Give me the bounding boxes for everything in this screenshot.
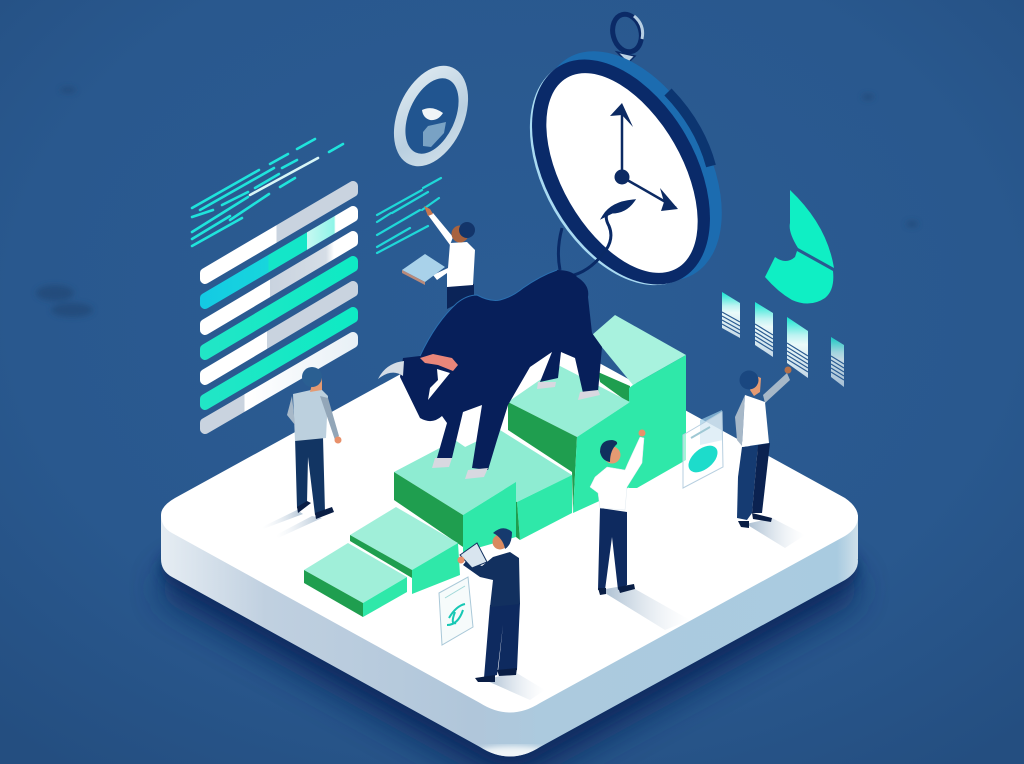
bull back highlight xyxy=(420,270,557,356)
clock hands xyxy=(610,103,678,211)
gap between head and neck xyxy=(428,369,450,400)
step F xyxy=(592,315,686,488)
person left xyxy=(287,367,342,519)
bull body xyxy=(400,270,602,470)
right card xyxy=(683,410,723,488)
bull hooves xyxy=(432,382,600,479)
bull xyxy=(378,270,602,479)
background smudges xyxy=(36,87,918,317)
small ring icon xyxy=(379,54,483,178)
clock loop xyxy=(609,11,645,63)
platform side xyxy=(161,358,858,756)
text lines left xyxy=(192,139,343,246)
bull tail xyxy=(558,201,633,276)
step B xyxy=(350,507,460,594)
clock face xyxy=(515,48,729,298)
bull ear xyxy=(420,354,458,371)
clock xyxy=(493,11,759,316)
clock rim xyxy=(503,20,759,312)
mini bar panels xyxy=(722,292,844,387)
platform corner highlight xyxy=(480,744,543,756)
person with book xyxy=(402,206,475,309)
green stairs xyxy=(304,315,686,617)
platform top xyxy=(161,314,858,712)
bull horn xyxy=(378,361,404,379)
platform shadow xyxy=(161,366,858,764)
step E xyxy=(508,366,630,513)
text lines center xyxy=(377,178,441,253)
step A xyxy=(304,543,407,617)
progress bars panel xyxy=(205,186,353,429)
bottom card xyxy=(439,577,473,645)
step D xyxy=(463,430,572,540)
person bottom with tablet xyxy=(458,528,520,682)
step C xyxy=(394,440,516,552)
platform xyxy=(161,352,858,756)
pie chart xyxy=(765,190,834,304)
person front with raised hand xyxy=(590,430,646,595)
person right xyxy=(735,366,792,528)
foot shadows xyxy=(262,510,805,700)
